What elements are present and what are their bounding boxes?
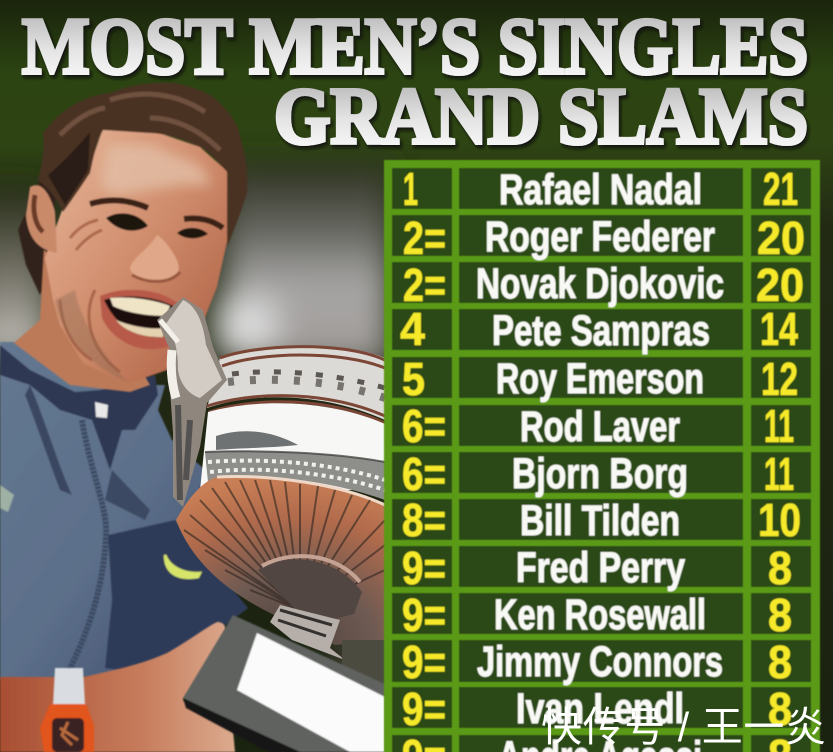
title xyxy=(22,3,808,161)
row 8: 8= xyxy=(402,494,446,546)
trophy handle xyxy=(157,297,227,507)
row 8: 10 xyxy=(758,494,801,546)
mouth xyxy=(104,296,180,337)
row 8: Bill Tilden xyxy=(520,497,680,545)
row 7: 6= xyxy=(402,448,446,500)
row 2: 2= xyxy=(403,212,446,264)
forehead highlight xyxy=(100,145,212,195)
row 7 xyxy=(392,448,811,500)
row 6: 11 xyxy=(764,400,794,452)
row 10: Ken Rosewall xyxy=(494,591,706,639)
row 10: 9= xyxy=(402,589,446,641)
cheek wrinkles xyxy=(60,220,120,372)
row 9: 8 xyxy=(768,542,792,594)
row 4: 14 xyxy=(760,303,798,355)
neck xyxy=(14,250,150,392)
row 11: 8 xyxy=(768,636,792,688)
row 12 xyxy=(392,683,811,735)
face xyxy=(45,128,228,384)
row 6: Rod Laver xyxy=(520,403,680,451)
lower teeth xyxy=(116,320,165,337)
nose xyxy=(130,235,179,281)
row 10 xyxy=(392,589,811,641)
trophy stem xyxy=(270,605,345,660)
trophy bowl xyxy=(200,403,385,490)
row 5: 5 xyxy=(402,353,425,405)
row 9: 9= xyxy=(402,542,446,594)
row 12: 9= xyxy=(402,683,446,735)
row 12: 8 xyxy=(768,683,792,735)
eyebrows xyxy=(90,201,223,228)
table frame xyxy=(384,160,820,752)
row 9: Fred Perry xyxy=(516,544,685,592)
hair xyxy=(38,83,247,247)
row 6 xyxy=(392,400,811,452)
row 4 xyxy=(392,303,811,355)
row 5 xyxy=(392,353,811,405)
row 11: Jimmy Connors xyxy=(477,638,723,686)
watermark: 快传号 / 王一炎 xyxy=(541,704,826,750)
lips xyxy=(100,290,183,349)
ear xyxy=(26,185,57,253)
row 7: Bjorn Borg xyxy=(512,450,688,498)
row 2 xyxy=(392,212,811,264)
upper teeth xyxy=(110,297,170,316)
row 7: 11 xyxy=(764,448,794,500)
row 6: 6= xyxy=(402,400,446,452)
blurred photo backdrop xyxy=(0,165,390,700)
row 3: 2= xyxy=(403,259,446,311)
row 11: 9= xyxy=(402,636,446,688)
row 5: Roy Emerson xyxy=(496,355,704,403)
row 5: 12 xyxy=(761,353,798,405)
row 3: 20 xyxy=(756,259,804,311)
eyes xyxy=(106,213,208,238)
head and neck xyxy=(14,83,247,392)
row 9 xyxy=(392,542,811,594)
row 4: Pete Sampras xyxy=(492,307,710,355)
trophy fan xyxy=(176,476,385,645)
row 12: Ivan Lendl xyxy=(516,685,684,733)
jacket xyxy=(0,342,248,680)
hair behind ear xyxy=(18,180,55,295)
row 2: Roger Federer xyxy=(485,213,715,261)
row 1 xyxy=(392,163,811,215)
trophy xyxy=(157,297,385,690)
row 1: 21 xyxy=(763,163,798,215)
photo: player with trophy xyxy=(0,83,385,752)
row 2: 20 xyxy=(757,212,805,264)
row 8 xyxy=(392,494,811,546)
row 1: Rafael Nadal xyxy=(499,166,702,214)
trophy rim xyxy=(207,346,385,420)
row 1: 1 xyxy=(403,163,418,215)
row 4: 4 xyxy=(400,303,425,355)
table panel xyxy=(384,160,820,752)
row 13 xyxy=(392,730,811,752)
wristwatch xyxy=(40,668,94,752)
stubble xyxy=(55,290,127,382)
row 10: 8 xyxy=(768,589,792,641)
trophy plinth xyxy=(183,615,385,752)
arm and hand xyxy=(0,622,235,752)
row 3: Novak Djokovic xyxy=(476,260,724,308)
